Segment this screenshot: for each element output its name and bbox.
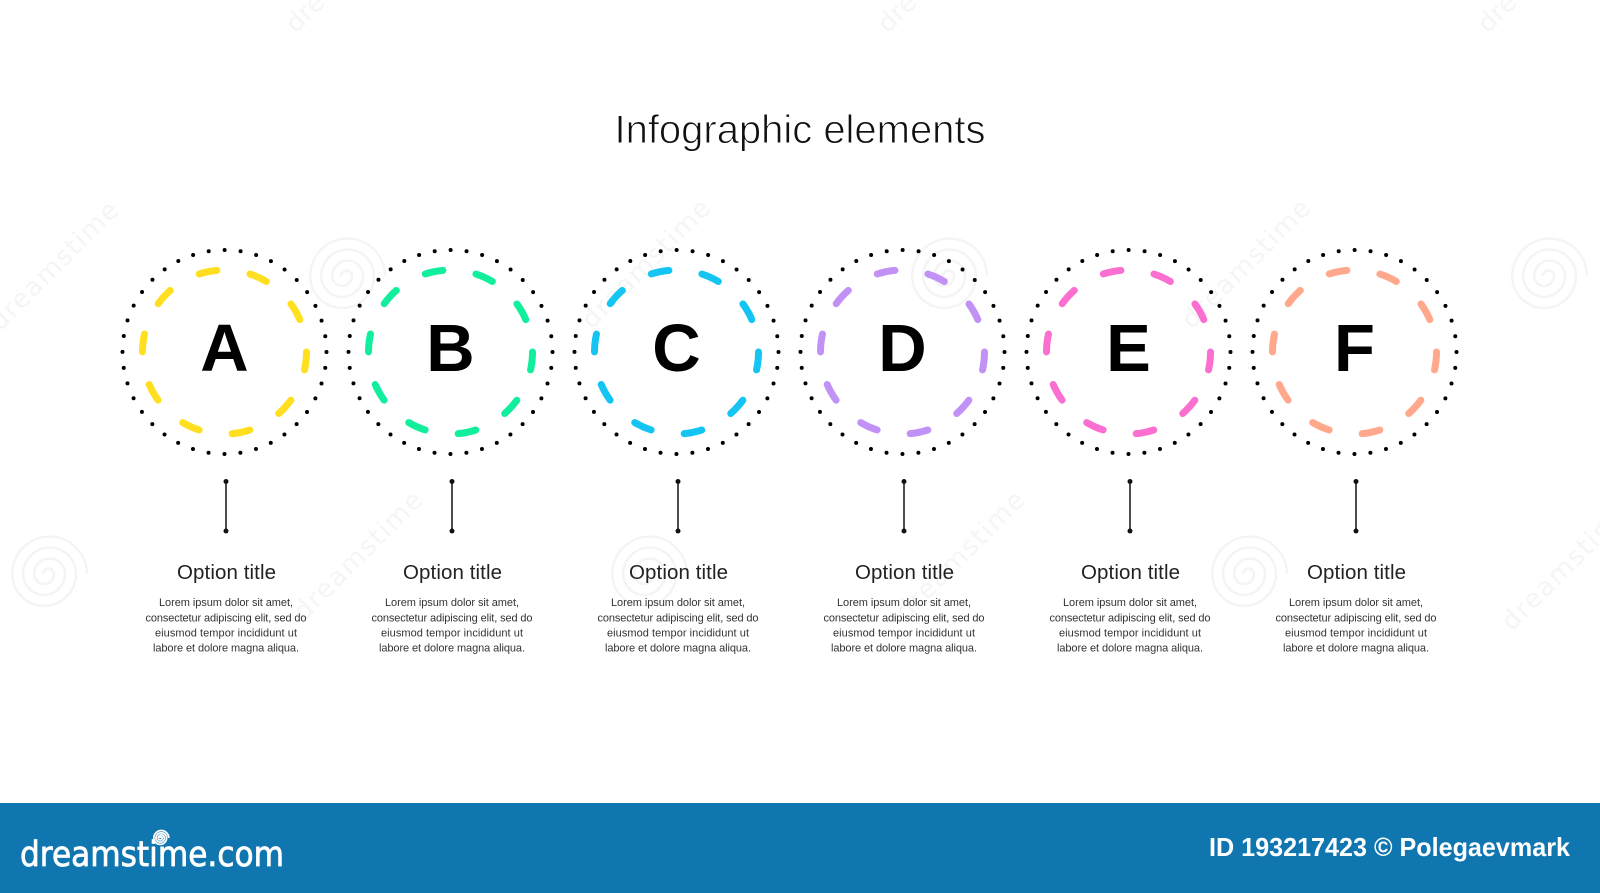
- connector B: [450, 480, 454, 533]
- icon: ring E: [1026, 250, 1230, 454]
- watermark layer: dreamstime: [576, 194, 717, 335]
- connector D: [902, 480, 906, 533]
- icon: ring A: A: [200, 311, 249, 386]
- connector C: [676, 480, 680, 533]
- text block A: Lorem ipsum dolor sit amet,: [159, 597, 293, 609]
- text block F: eiusmod tempor incididunt ut: [1285, 628, 1427, 640]
- watermark layer: dreamstime: [288, 486, 429, 627]
- text block E: labore et dolore magna aliqua.: [1057, 643, 1203, 655]
- text block F: [1276, 597, 1436, 655]
- text block C: consectetur adipiscing elit, sed do: [598, 612, 758, 624]
- text block F: Lorem ipsum dolor sit amet,: [1289, 597, 1423, 609]
- logo text: dreamstime.com: [20, 835, 284, 875]
- icon: ring C: [574, 250, 778, 454]
- image id and credit: ID 193217423 © Polegaevmark: [1209, 832, 1571, 862]
- panel: option B: [348, 250, 552, 655]
- footer bar: [0, 803, 1600, 893]
- text block B: labore et dolore magna aliqua.: [379, 643, 525, 655]
- text block E: eiusmod tempor incididunt ut: [1059, 628, 1201, 640]
- icon: ring F: [1252, 250, 1456, 454]
- text block C: eiusmod tempor incididunt ut: [607, 628, 749, 640]
- panel: option D: [800, 250, 1004, 655]
- panel: option F: [1252, 250, 1456, 655]
- text block D: eiusmod tempor incididunt ut: [833, 628, 975, 640]
- icon: logo spiral: [154, 831, 169, 844]
- text block D: [824, 597, 984, 655]
- panel: option E: [1026, 250, 1230, 655]
- text block B: [372, 597, 532, 655]
- heading B: Option title: [403, 561, 502, 584]
- icon: ring B: B: [426, 311, 475, 386]
- text block C: [598, 597, 758, 655]
- text block D: labore et dolore magna aliqua.: [831, 643, 977, 655]
- heading D: Option title: [855, 561, 954, 584]
- connector F: [1354, 480, 1358, 533]
- text block B: eiusmod tempor incididunt ut: [381, 628, 523, 640]
- text block D: Lorem ipsum dolor sit amet,: [837, 597, 971, 609]
- text block E: consectetur adipiscing elit, sed do: [1050, 612, 1210, 624]
- text block F: labore et dolore magna aliqua.: [1283, 643, 1429, 655]
- icon: ring B: [348, 250, 552, 454]
- title: Infographic elements: [614, 108, 986, 152]
- text block F: consectetur adipiscing elit, sed do: [1276, 612, 1436, 624]
- icon: ring D: [800, 250, 1004, 454]
- text block A: eiusmod tempor incididunt ut: [155, 628, 297, 640]
- icon: ring E: E: [1106, 311, 1151, 386]
- text block C: labore et dolore magna aliqua.: [605, 643, 751, 655]
- text block E: Lorem ipsum dolor sit amet,: [1063, 597, 1197, 609]
- heading E: Option title: [1081, 561, 1180, 584]
- text block B: Lorem ipsum dolor sit amet,: [385, 597, 519, 609]
- panel: option A: [122, 250, 326, 655]
- text block D: consectetur adipiscing elit, sed do: [824, 612, 984, 624]
- heading A: Option title: [177, 561, 276, 584]
- watermark layer: dreamstime: [1176, 194, 1317, 335]
- text block A: labore et dolore magna aliqua.: [153, 643, 299, 655]
- text block E: [1050, 597, 1210, 655]
- heading F: Option title: [1307, 561, 1406, 584]
- heading C: Option title: [629, 561, 728, 584]
- watermark layer: [0, 0, 1600, 637]
- panel: option C: [574, 250, 778, 655]
- icon: ring D: D: [878, 311, 927, 386]
- text block C: Lorem ipsum dolor sit amet,: [611, 597, 745, 609]
- connector E: [1128, 480, 1132, 533]
- text block A: [146, 597, 306, 655]
- text block B: consectetur adipiscing elit, sed do: [372, 612, 532, 624]
- icon: ring F: F: [1334, 311, 1375, 386]
- watermark layer: dreamstime: [890, 486, 1031, 627]
- icon: ring C: C: [652, 311, 701, 386]
- icon: ring A: [122, 250, 326, 454]
- connector A: [224, 480, 228, 533]
- text block A: consectetur adipiscing elit, sed do: [146, 612, 306, 624]
